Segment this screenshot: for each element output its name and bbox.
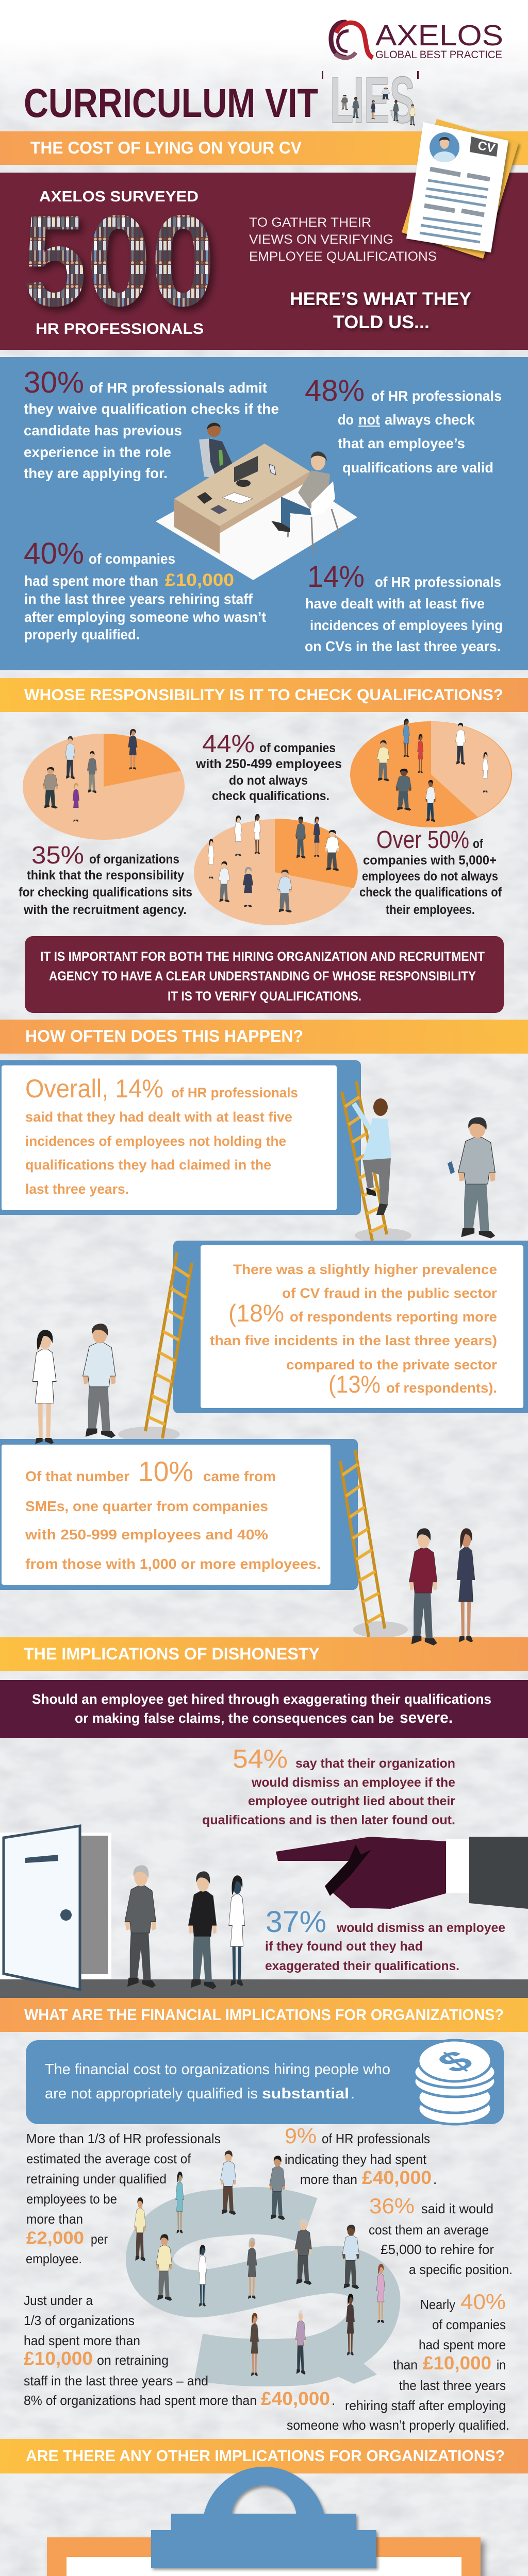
stat: nearly 40% xyxy=(287,2290,509,2433)
stat: 9% indicating: £40,000 xyxy=(362,2167,432,2188)
stat: nearly 40%: rehiring staff after employing xyxy=(345,2398,506,2413)
stat: 37%: exaggerated their qualifications. xyxy=(265,1959,459,1973)
panel: dishonesty banner: severe. xyxy=(400,1708,453,1726)
panel: financial cost xyxy=(26,2040,504,2124)
number: 500 made of people: 500 xyxy=(23,189,215,333)
panel: overall 14%: of HR professionals xyxy=(171,1085,298,1100)
stat: 35%: with the recruitment agency. xyxy=(23,903,187,917)
text: just under a third: 8% of organizations had spent more than xyxy=(24,2393,257,2408)
stat: 36%: a specific position. xyxy=(409,2262,513,2277)
stat: 54% xyxy=(202,1744,455,1827)
text: just under a third: staff in the last three years – and xyxy=(24,2373,208,2388)
text: retraining cost: retraining under qualified xyxy=(26,2171,167,2187)
stat: 9% indicating: indicating they had spent xyxy=(285,2151,427,2167)
stat: over 50%: employees do not always xyxy=(362,869,498,884)
illustration: man with phone xyxy=(448,1117,495,1239)
stat: 44%: of companies xyxy=(259,741,336,755)
section heading: other implications: ARE THERE ANY OTHER IMPLICATIONS FOR ORGANIZATIONS? xyxy=(26,2447,505,2465)
stat: nearly 40%: £10,000 xyxy=(423,2352,491,2374)
stat: 48%: qualifications are valid xyxy=(342,460,493,476)
text: just under a third: had spent more than xyxy=(24,2333,140,2348)
stat: 14%: on CVs in the last three years. xyxy=(305,638,501,654)
stat: 54%: say that their organization xyxy=(295,1756,455,1771)
stat: 30%: of HR professionals admit xyxy=(89,380,267,396)
chart: pie over 50% xyxy=(350,719,512,827)
stat: 37%: 37% xyxy=(266,1905,326,1939)
clipboard board xyxy=(47,2537,481,2576)
text: retraining cost: estimated the average cost of xyxy=(26,2151,191,2166)
panel: overall 14%: incidences of employees not holding the xyxy=(25,1133,286,1149)
section heading: implications of dishonesty: THE IMPLICATIONS OF DISHONESTY xyxy=(24,1645,320,1663)
panel: public sector: There was a slightly higher prevalence xyxy=(233,1262,497,1277)
stat: 48% xyxy=(305,374,502,476)
stat: 36%: £5,000 to rehire for xyxy=(381,2242,494,2257)
stat: 36%: said it would xyxy=(421,2201,493,2216)
stat: 36% xyxy=(369,2194,513,2277)
stat: 44%: check qualifications. xyxy=(212,789,329,803)
title: LIES xyxy=(330,63,415,137)
callout: clear understanding: IT IS IMPORTANT FOR BOTH THE HIRING ORGANIZATION AND RECRUITMENT xyxy=(40,950,485,964)
text: retraining cost xyxy=(26,2131,221,2266)
text: to gather their views: VIEWS ON VERIFYING xyxy=(249,232,393,247)
stat: 9% indicating: . xyxy=(433,2172,437,2187)
panel: public sector: of CV fraud in the public sector xyxy=(282,1285,498,1301)
stat: 35%: for checking qualifications sits xyxy=(19,885,192,900)
section heading: the cost of lying xyxy=(0,131,528,165)
stat: 14%: 14% xyxy=(307,560,365,594)
section heading: other implications xyxy=(0,2439,528,2473)
clipboard clip xyxy=(151,2467,376,2568)
title xyxy=(24,63,419,137)
stat: 9% indicating: 9% xyxy=(285,2124,317,2148)
panel: of that number 10%: Of that number xyxy=(25,1468,129,1484)
icon: coin stack: $ xyxy=(428,2044,482,2079)
illustration: couple standing xyxy=(409,1528,475,1646)
stat: over 50%: their employees. xyxy=(386,903,475,917)
stat: over 50%: of xyxy=(473,837,484,851)
panel: headline statistics xyxy=(0,357,528,670)
section heading: whose responsibility xyxy=(0,678,528,712)
stat: 35%: 35% xyxy=(31,842,84,869)
text: just under a third: £40,000 xyxy=(261,2388,330,2409)
stat: 37% xyxy=(265,1905,505,1973)
stat: 30%: candidate has previous xyxy=(24,422,182,438)
text: to gather their views: EMPLOYEE QUALIFICATIONS xyxy=(249,249,437,264)
stat: 44% xyxy=(195,731,342,803)
stat: nearly 40%: the last three years xyxy=(399,2378,506,2393)
stat: 54%: employee outright lied about their xyxy=(248,1794,455,1808)
stat: nearly 40%: 40% xyxy=(460,2290,506,2314)
stat: 40%: of companies xyxy=(89,551,175,567)
text: just under a third xyxy=(24,2293,335,2409)
stat: 40% xyxy=(24,537,266,642)
panel: overall 14% xyxy=(0,1060,361,1215)
stat: 54%: 54% xyxy=(233,1744,288,1773)
section heading: the cost of lying: THE COST OF LYING ON YOUR CV xyxy=(30,138,302,157)
panel: of that number 10%: 10% xyxy=(138,1455,193,1487)
illustration: ladder two xyxy=(118,1252,192,1442)
stat: 9% indicating: more than xyxy=(300,2172,357,2187)
stat: 9% indicating xyxy=(285,2124,437,2188)
section heading: financial implications: WHAT ARE THE FINANCIAL IMPLICATIONS FOR ORGANIZATIONS? xyxy=(24,2006,504,2024)
panel: public sector: of respondents reporting more xyxy=(290,1309,497,1325)
text: to gather their views: TO GATHER THEIR xyxy=(249,215,371,230)
stat: 48%: that an employee’s xyxy=(338,435,465,451)
text: here's what they told us: HERE’S WHAT THEY xyxy=(290,289,471,309)
panel: public sector xyxy=(173,1241,528,1413)
illustration: interview at desk xyxy=(156,422,357,580)
section heading: how often: HOW OFTEN DOES THIS HAPPEN? xyxy=(25,1027,303,1045)
panel: dishonesty banner: Should an employee get hired through exaggerating their qualifications xyxy=(32,1691,491,1707)
stat: 14% xyxy=(305,560,503,654)
stat: 14%: incidences of employees lying xyxy=(310,617,503,633)
stat: 48%: 48% xyxy=(305,374,365,408)
text: here's what they told us xyxy=(290,289,471,332)
illustration: woman and man standing xyxy=(32,1324,116,1444)
panel: of that number 10%: SMEs, one quarter from companies xyxy=(25,1498,268,1514)
callout: clear understanding xyxy=(25,936,504,1013)
stat: 30%: they waive qualification checks if the xyxy=(24,401,279,417)
stat: 30%: 30% xyxy=(24,366,84,399)
text: just under a third: £10,000 xyxy=(24,2348,93,2369)
panel: dishonesty banner xyxy=(0,1680,528,1738)
chart: pie 35% organizations xyxy=(23,729,185,840)
illustration: three employees xyxy=(125,1865,245,1989)
panel: of that number 10%: from those with 1,000 or more employees. xyxy=(25,1556,321,1572)
panel: financial cost: are not appropriately qualified is xyxy=(45,2086,258,2102)
stat: 44%: do not always xyxy=(229,773,308,788)
stat: 54%: would dismiss an employee if the xyxy=(251,1775,455,1790)
panel: public sector: (13% xyxy=(328,1370,381,1398)
panel: public sector: than five incidents in the last three years) xyxy=(210,1333,497,1348)
panel: overall 14%: qualifications they had claimed in the xyxy=(25,1157,271,1173)
icon: pointing hand xyxy=(276,1837,528,1909)
section heading: whose responsibility: WHOSE RESPONSIBILITY IS IT TO CHECK QUALIFICATIONS? xyxy=(24,686,503,704)
stat: 37%: would dismiss an employee xyxy=(336,1921,505,1935)
text: to gather their views xyxy=(249,215,437,264)
text: retraining cost: More than 1/3 of HR professionals xyxy=(26,2131,221,2146)
illustration: people on pound symbol xyxy=(135,2150,385,2384)
stat: 48%: of HR professionals xyxy=(371,388,502,404)
text: axelos surveyed: AXELOS SURVEYED xyxy=(39,189,199,205)
illustration: ladder one with climber xyxy=(342,1081,411,1243)
stat: 40%: £10,000 xyxy=(165,570,234,590)
stat: 40%: had spent more than xyxy=(24,573,158,589)
panel: public sector: (18% xyxy=(228,1299,284,1327)
panel: overall 14%: said that they had dealt with at least five xyxy=(25,1109,292,1125)
stat: nearly 40%: had spent more xyxy=(419,2337,506,2352)
panel: financial cost: The financial cost to organizations hiring people who xyxy=(45,2061,390,2078)
panel: public sector: of respondents). xyxy=(386,1380,497,1396)
panel: financial cost: substantial xyxy=(262,2086,349,2102)
callout: clear understanding: AGENCY TO HAVE A CLEAR UNDERSTANDING OF WHOSE RESPONSIBILITY xyxy=(49,969,476,984)
stat: over 50%: companies with 5,000+ xyxy=(363,853,497,868)
text: just under a third: . xyxy=(332,2393,335,2408)
callout: clear understanding: IT IS TO VERIFY QUALIFICATIONS. xyxy=(168,989,361,1004)
stat: 40%: after employing someone who wasn’t xyxy=(24,609,266,625)
text: retraining cost: more than xyxy=(26,2211,83,2227)
chart: pie 44% companies xyxy=(194,814,358,925)
stat: 30%: experience in the role xyxy=(24,444,171,460)
panel: financial cost: . xyxy=(351,2086,355,2102)
stat: 30%: they are applying for. xyxy=(24,465,168,481)
icon: coin stack xyxy=(414,2040,496,2124)
title: CURRICULUM VIT xyxy=(24,80,318,126)
text: retraining cost: employees to be xyxy=(26,2191,117,2207)
stat: 44%: 44% xyxy=(202,731,255,758)
panel: overall 14%: Overall, 14% xyxy=(25,1074,163,1103)
panel: overall 14%: last three years. xyxy=(25,1181,129,1197)
stat: 14%: of HR professionals xyxy=(375,574,501,590)
panel: clipboard checklist xyxy=(47,2467,481,2576)
stat: 48%: not xyxy=(358,412,380,428)
illustration: door and floor xyxy=(0,1826,528,1998)
section heading: implications of dishonesty xyxy=(0,1637,528,1671)
stat: 37%: if they found out they had xyxy=(265,1939,423,1954)
stat: nearly 40%: of companies xyxy=(432,2317,506,2332)
section heading: financial implications xyxy=(0,1998,528,2032)
stat: 9% indicating: of HR professionals xyxy=(322,2131,430,2146)
stat: 44%: with 250-499 employees xyxy=(195,757,342,771)
stat: 40%: in the last three years rehiring staff xyxy=(24,591,253,607)
stat: 36%: 36% xyxy=(369,2194,415,2218)
panel: of that number 10%: with 250-999 employees and 40% xyxy=(25,1527,268,1543)
stat: 40%: 40% xyxy=(24,537,84,570)
text: here's what they told us: TOLD US... xyxy=(333,312,430,332)
logo: AXELOS top: AXELOS xyxy=(375,19,503,52)
stat: 54%: qualifications and is then later found out. xyxy=(202,1813,455,1827)
stat: over 50% xyxy=(359,826,502,917)
icon: CV document xyxy=(402,119,519,259)
panel: survey intro xyxy=(0,173,528,350)
text: retraining cost: employee. xyxy=(26,2251,82,2266)
panel: public sector: compared to the private sector xyxy=(286,1357,497,1372)
stat: 35%: of organizations xyxy=(89,852,179,867)
icon: CV document: CV xyxy=(476,139,496,156)
panel: of that number 10%: came from xyxy=(203,1468,276,1484)
stat: 35%: think that the responsibility xyxy=(27,868,184,883)
text: just under a third: on retraining xyxy=(97,2352,169,2368)
logo: AXELOS top xyxy=(331,19,503,61)
stat: nearly 40%: Nearly xyxy=(420,2297,455,2312)
stat: nearly 40%: in xyxy=(497,2357,506,2372)
stat: over 50%: check the qualifications of xyxy=(359,885,502,900)
logo: AXELOS top: GLOBAL BEST PRACTICE xyxy=(375,49,502,61)
stat: 48%: always check xyxy=(385,412,475,428)
stat: 30% xyxy=(24,366,279,481)
text: just under a third: Just under a xyxy=(24,2293,93,2308)
stat: nearly 40%: someone who wasn’t properly qualified. xyxy=(287,2417,509,2433)
stat: 36%: cost them an average xyxy=(369,2222,489,2238)
section heading: how often xyxy=(0,1020,528,1054)
stat: 48%: do xyxy=(338,412,354,428)
stat: over 50%: Over 50% xyxy=(376,826,469,854)
text: just under a third: 1/3 of organizations xyxy=(24,2313,135,2328)
illustration: ladder three with couple xyxy=(340,1450,408,1638)
stat: 14%: have dealt with at least five xyxy=(305,596,485,612)
text: hr professionals: HR PROFESSIONALS xyxy=(36,320,204,337)
text: retraining cost: per xyxy=(91,2231,108,2247)
panel: of that number 10% xyxy=(0,1439,358,1590)
stat: 40%: properly qualified. xyxy=(24,626,140,642)
panel: dishonesty banner: or making false claims, the consequences can be xyxy=(75,1710,394,1726)
stat: nearly 40%: than xyxy=(393,2357,418,2372)
stat: 35% xyxy=(19,842,192,917)
text: retraining cost: £2,000 xyxy=(26,2228,84,2248)
